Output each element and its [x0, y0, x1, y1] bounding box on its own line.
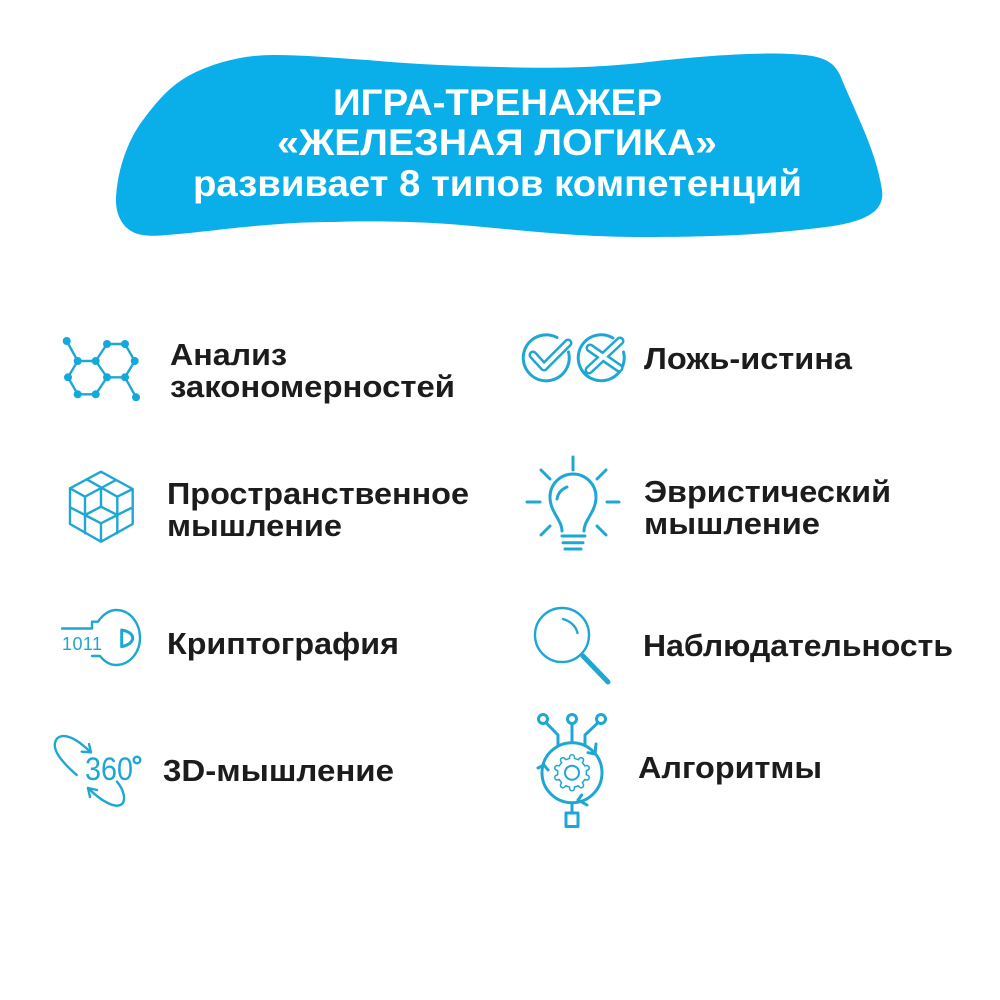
- icon: 360 degrees rotation: 360: [85, 751, 133, 787]
- item: true-false: [523, 335, 853, 381]
- item: pattern analysis: [63, 337, 455, 404]
- label: Ложь-истина: [644, 341, 853, 376]
- item: observation: [535, 608, 953, 682]
- label: 3D-мышление: [163, 753, 394, 788]
- icon: gear circuit: [538, 714, 606, 826]
- label: закономерностей: [170, 369, 455, 404]
- icon: key with binary digits: [62, 610, 140, 665]
- label: Криптография: [167, 626, 399, 661]
- label: Пространственное: [167, 476, 469, 511]
- label: Наблюдательность: [643, 628, 953, 663]
- title text: ИГРА-ТРЕНАЖЕР: [333, 82, 662, 123]
- item: algorithms: [538, 714, 822, 826]
- icon: light bulb: [527, 457, 619, 549]
- icon: key with binary digits: 1011: [62, 634, 102, 654]
- label: мышление: [644, 506, 820, 541]
- icon: cube: [70, 472, 133, 542]
- label: [644, 474, 891, 541]
- title text: [193, 82, 802, 204]
- title text: развивает 8 типов компетенций: [193, 163, 802, 204]
- label: [170, 337, 455, 404]
- label: мышление: [167, 508, 342, 543]
- label: Алгоритмы: [638, 750, 822, 785]
- item: heuristic thinking: [527, 457, 891, 549]
- item: cryptography: [62, 610, 399, 665]
- label: [167, 476, 469, 543]
- icon: 360 degrees rotation: [55, 736, 140, 806]
- icon: check and cross circles: [523, 335, 624, 381]
- header banner: [116, 54, 882, 237]
- icon: molecule: [63, 337, 140, 401]
- item: spatial thinking: [70, 472, 469, 543]
- item: 3D thinking: [55, 736, 394, 806]
- blue blob background: [116, 54, 882, 237]
- title text: «ЖЕЛЕЗНАЯ ЛОГИКА»: [277, 122, 717, 163]
- icon: magnifying glass: [535, 608, 608, 682]
- label: Анализ: [170, 337, 287, 372]
- label: Эвристический: [644, 474, 891, 509]
